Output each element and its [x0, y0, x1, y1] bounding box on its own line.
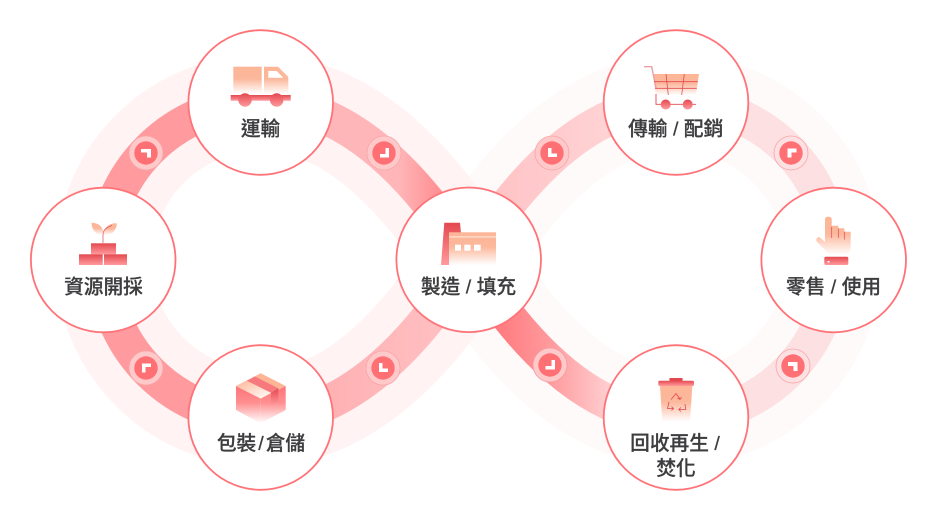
- pale outer band: right loop: [469, 103, 834, 418]
- main band: left loop: [104, 103, 261, 418]
- node: recycling and incineration: [604, 345, 748, 490]
- main band: right loop: [676, 103, 834, 418]
- main band: manufacturing to recycling: [469, 260, 676, 418]
- icon: pointing hand: [816, 217, 851, 265]
- node: transport: [188, 30, 333, 175]
- icon: truck: [231, 67, 291, 107]
- label: distribution and sales: 傳輸 / 配銷: [628, 118, 723, 140]
- icon: shopping cart: [644, 67, 699, 110]
- node: packaging and warehousing: [188, 345, 333, 490]
- label: manufacturing and filling: 製造 / 填充: [421, 276, 516, 298]
- label: transport: 運輸: [241, 118, 280, 140]
- label: packaging and warehousing: 包裝/倉儲: [217, 433, 305, 455]
- arrow marker: raw materials to packaging: [129, 351, 163, 385]
- node: manufacturing and filling: [396, 187, 541, 332]
- main band: manufacturing to distribution: [469, 103, 676, 260]
- icon: parcel box: [236, 373, 286, 423]
- main band: packaging to manufacturing: [261, 260, 469, 418]
- node: retail and use: [761, 188, 906, 332]
- arrow marker: manufacturing to recycling: [533, 348, 567, 382]
- pale outer band: left loop: [104, 103, 469, 418]
- arrow marker: packaging to manufacturing: [366, 351, 400, 385]
- arrow marker: distribution to retail: [774, 136, 808, 170]
- icon: recycling bin: [658, 378, 694, 422]
- label: raw material extraction: 資源開採: [64, 276, 143, 298]
- icon: factory: [441, 223, 496, 265]
- label: recycling and incineration: 焚化: [656, 458, 696, 480]
- arrow marker: raw materials to transport: [129, 136, 163, 170]
- arrow marker: transport to manufacturing: [367, 136, 401, 170]
- label: retail and use: 零售 / 使用: [786, 276, 881, 298]
- node: raw material extraction: [31, 188, 176, 332]
- arrow marker: manufacturing to distribution: [535, 136, 569, 170]
- main band: transport to manufacturing: [261, 103, 469, 260]
- node: distribution and sales: [604, 30, 748, 175]
- icon: sprout on bricks: [79, 223, 127, 265]
- label: recycling and incineration: [630, 433, 720, 480]
- arrow marker: retail to recycling: [776, 349, 810, 383]
- label: recycling and incineration: 回收再生 /: [630, 433, 720, 455]
